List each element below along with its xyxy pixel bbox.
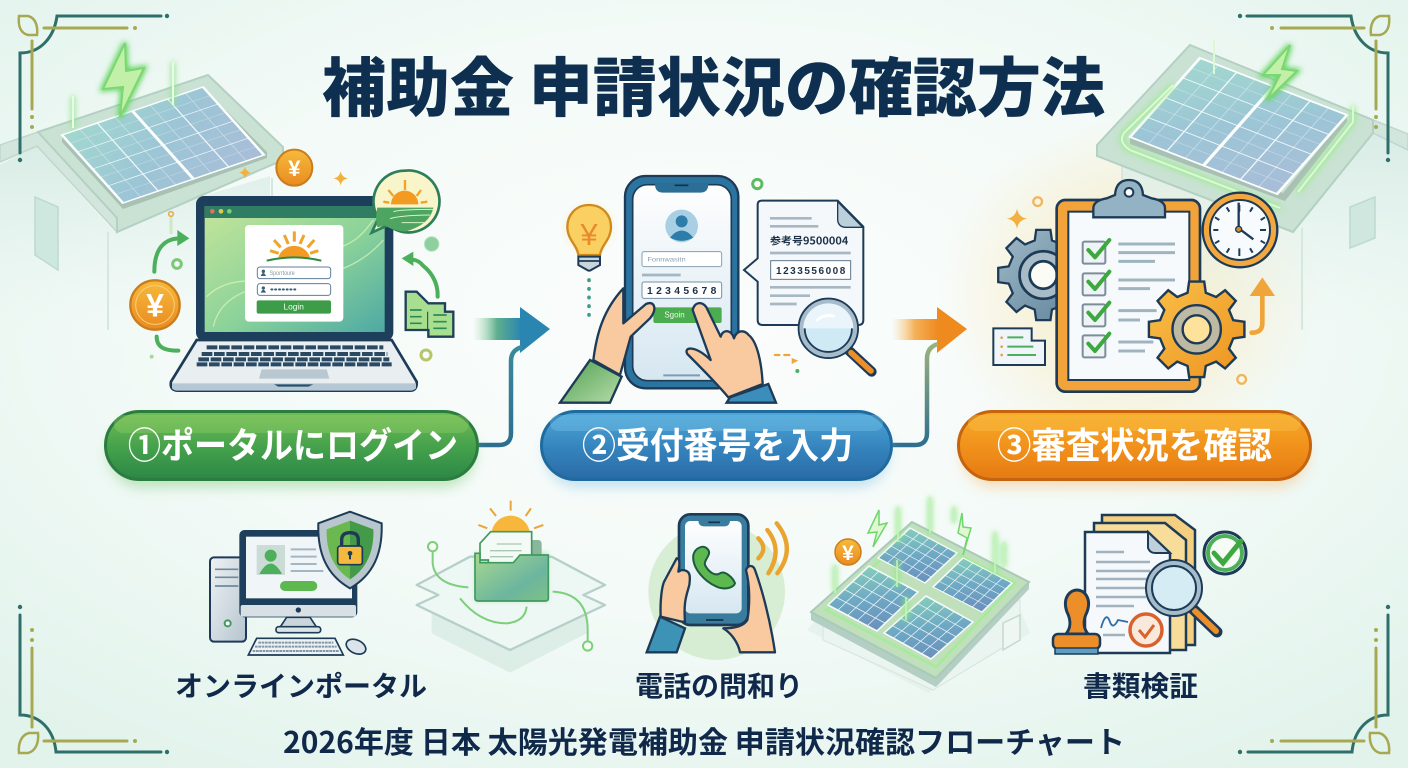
arrow: step 2 to step 3: [892, 307, 967, 445]
icon: document verification: [1053, 515, 1246, 654]
icon: folder over isometric platform: [417, 501, 605, 673]
login card: Sporrtoure: [270, 271, 295, 277]
step 1 pill: ①ポータルにログイン: [128, 417, 458, 469]
icon: yen coin top: ¥: [288, 156, 301, 181]
title: 補助金 申請状況の確認方法: [322, 38, 1105, 130]
icon: sun logo: [267, 231, 321, 261]
icon: sun speech bubble: [372, 170, 440, 233]
background illustration: house with solar panel, left: [0, 43, 283, 330]
step 3 illustration: clipboard review: [993, 180, 1277, 392]
icon: light bulb with yen: [559, 198, 619, 271]
icon: online portal computer with shield: [210, 512, 382, 657]
icon: magnifying glass: [802, 302, 872, 372]
corner ornament: bottom left: [18, 605, 169, 754]
login card: [245, 225, 343, 322]
icon: reference document: [744, 201, 863, 325]
step 2 pill: ②受付番号を入力: [582, 417, 853, 469]
icon: solar roof with panels: ¥: [842, 542, 854, 565]
icon: yen coin left: ¥: [146, 288, 164, 324]
corner ornament: bottom right: [1238, 605, 1390, 754]
label: document verification: 書類検証: [1083, 665, 1198, 705]
step 3 pill: ③審査状況を確認: [997, 417, 1272, 469]
icon: yen coin left: [130, 280, 180, 330]
icon: blue gear: [998, 230, 1088, 320]
arrow: step 1 to step 2: [473, 307, 550, 445]
icon: cycle arrows and dots: [150, 212, 439, 360]
icon: phone inquiry: [647, 514, 787, 660]
step 1 pill: [106, 412, 478, 488]
icon: left hand: [560, 288, 654, 403]
checklist: [1083, 240, 1175, 357]
icon: light bulb with yen: ¥: [579, 218, 598, 252]
icon: clock: [1203, 193, 1277, 267]
icon: phone: 12345678: [647, 286, 717, 297]
icon: up arrow: [1250, 277, 1275, 333]
icon: ring: [753, 179, 762, 189]
icon: small dashes: [775, 355, 799, 373]
icon: yen coin top: [276, 150, 312, 186]
corner ornament: top left: [18, 14, 169, 162]
step 1 illustration: laptop portal login: [130, 150, 453, 391]
icon: reference document: 1233556008: [776, 266, 846, 277]
login card: •••••••: [270, 285, 297, 294]
icon: phone: Fonnwasitn: [647, 256, 686, 263]
icon: phone: Sgoin: [664, 311, 685, 320]
dotted line: [583, 280, 594, 317]
icon: clipboard: [1057, 180, 1200, 392]
background illustration: house with solar panel, right: [1097, 40, 1408, 330]
step 2 pill: [542, 412, 892, 488]
footer caption: 2026年度 日本 太陽光発電補助金 申請状況確認フローチャート: [283, 718, 1125, 762]
decorative glow behind step 3: [940, 120, 1320, 460]
login card: Login: [283, 301, 304, 311]
icon: orange gear: [1149, 282, 1244, 377]
icon: phone: [625, 176, 738, 388]
icon: sparkles: [239, 167, 348, 186]
laptop screen: [196, 196, 393, 341]
step 3 pill: [958, 412, 1310, 488]
label: online portal: オンラインポータル: [175, 665, 427, 705]
corner ornament: top right: [1238, 14, 1390, 162]
icon: reference document: 参考号9500004: [770, 232, 848, 247]
icon: solar roof with panels: [807, 497, 1030, 693]
icon: sparkle and rings: [1007, 197, 1246, 384]
icon: right hand: [687, 303, 776, 403]
step 2 illustration: phone with reference number: [559, 176, 872, 403]
icon: small note: [993, 328, 1045, 365]
label: phone inquiry: 電話の問和り: [635, 665, 803, 705]
icon: document folder: [406, 292, 453, 337]
laptop base: [171, 340, 417, 391]
